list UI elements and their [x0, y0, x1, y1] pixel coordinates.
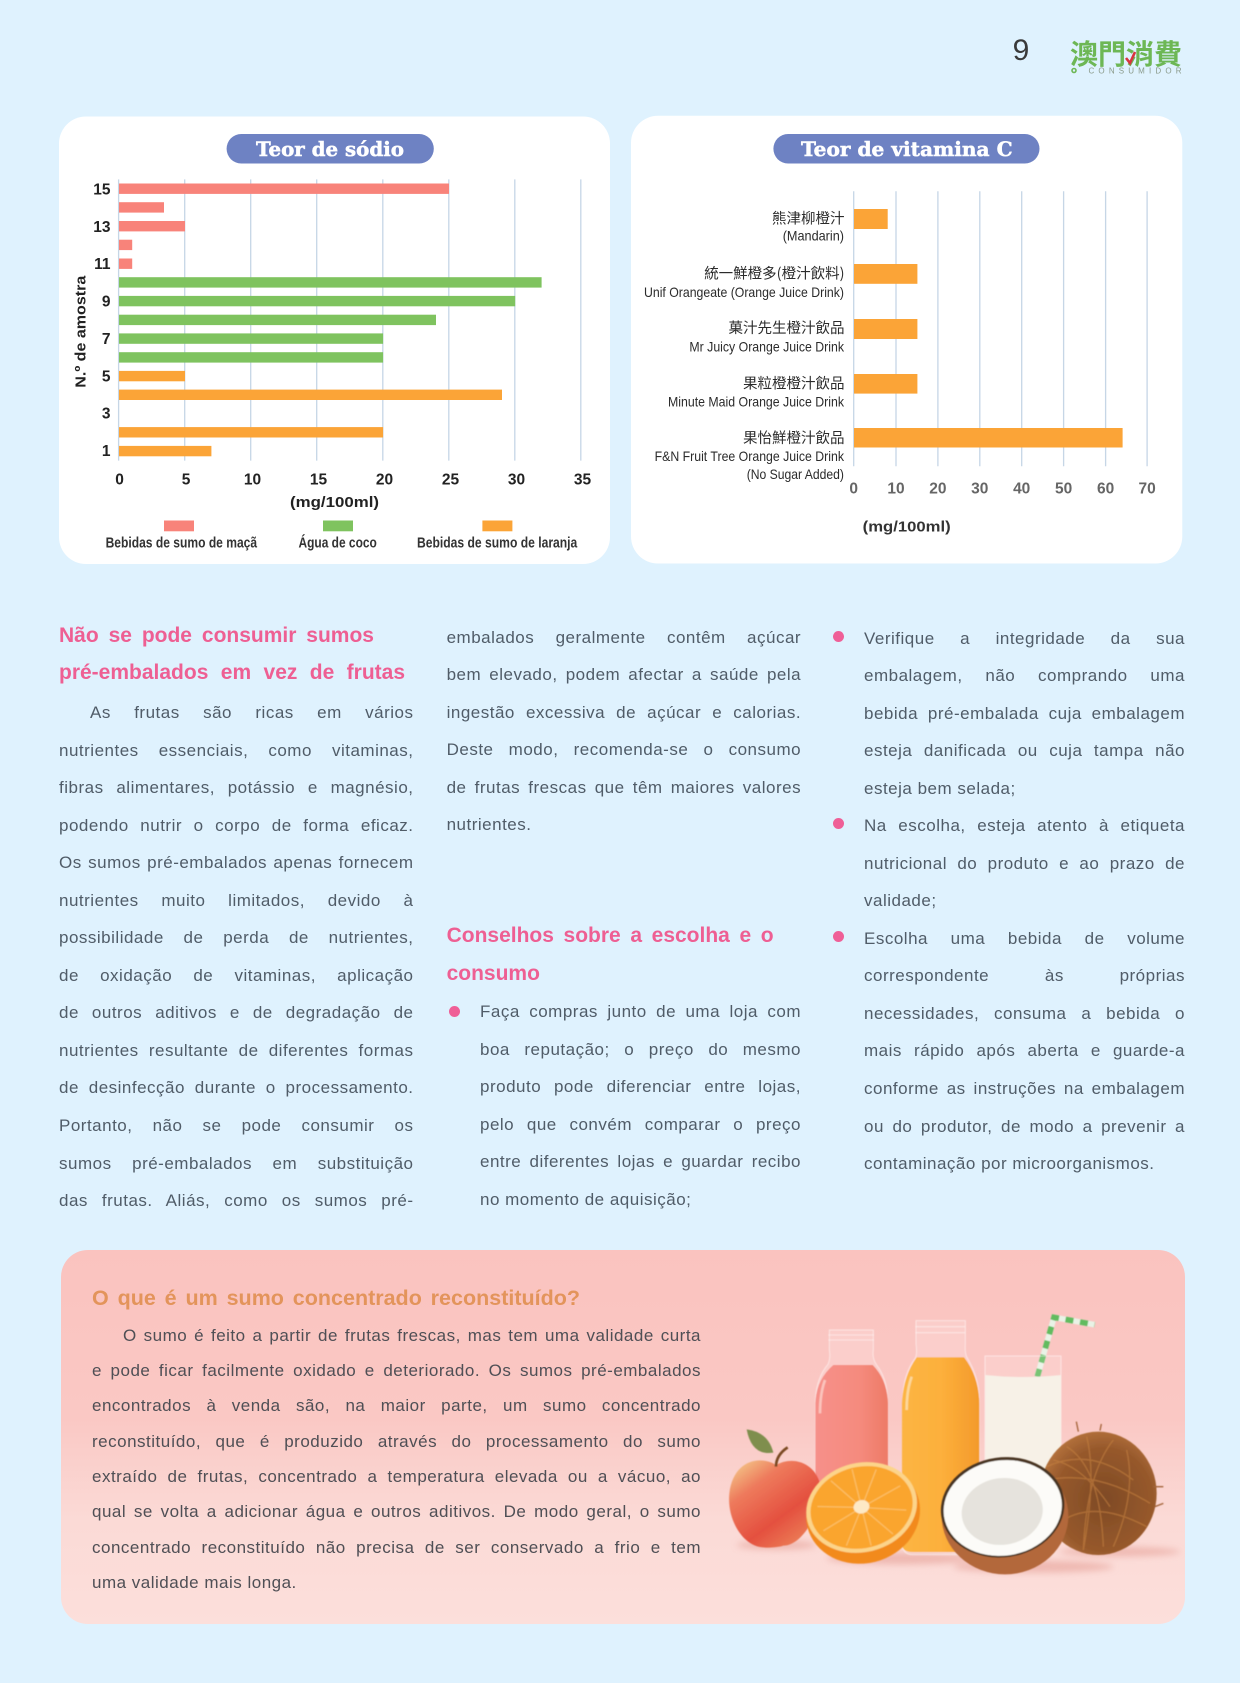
- product labels: Mr Juicy Orange Juice Drink: [689, 339, 845, 355]
- heading: Não se pode consumir sumos pré-embalados em vez de frutas: Não se pode consumir sumos: [59, 624, 374, 647]
- text block: column 2 body: ingestão excessiva de açúcar e calorias.: [447, 703, 801, 722]
- heading: Conselhos sobre a escolha e o consumo: consumo: [447, 962, 540, 985]
- bullet: integridade da embalagem: embalagem, não comprando uma: [864, 666, 1185, 685]
- bullet: loja com boa reputação: Faça compras junto de uma loja com: [480, 1002, 801, 1021]
- legend: Bebidas de sumo de maçã: [106, 534, 258, 552]
- text block: explainer body: qual se volta a adicionar água e outros aditivos. De modo geral, o sumo: [92, 1502, 701, 1521]
- bars: coconut water: [119, 277, 542, 363]
- x axis unit: (mg/100ml): [863, 518, 951, 536]
- product labels: 果怡鮮橙汁飲品: [743, 427, 844, 448]
- panel: concentrated juice explainer: [61, 1250, 1185, 1624]
- y axis title: N.º de amostra: [72, 275, 90, 388]
- bars: vitamin C by product: [854, 209, 1123, 448]
- bullet: loja com boa reputação: boa reputação; o preço do mesmo: [480, 1040, 801, 1059]
- x axis labels: 20: [929, 480, 947, 497]
- heading pill: Teor de sódio: Teor de sódio: [256, 137, 404, 161]
- x axis labels: 10: [887, 480, 905, 497]
- bullet: volume e conservação: conforme as instruções na embalagem: [864, 1079, 1185, 1098]
- text block: explainer body: reconstituído, que é produzido através do processamento do sumo: [92, 1432, 701, 1451]
- text block: column 1 body: fibras alimentares, potássio e magnésio,: [59, 778, 414, 797]
- x axis labels: 15: [310, 471, 327, 488]
- page number: 9: [1013, 34, 1029, 67]
- x axis labels: 25: [442, 471, 459, 488]
- bullet: etiqueta nutricional: nutricional do produto e ao prazo de: [864, 854, 1185, 873]
- bullet: volume e conservação: contaminação por microorganismos.: [864, 1154, 1155, 1173]
- bullet: loja com boa reputação: no momento de aquisição;: [480, 1190, 691, 1209]
- bullet: etiqueta nutricional: validade;: [864, 891, 937, 910]
- bullet: integridade da embalagem: esteja bem selada;: [864, 779, 1016, 798]
- text block: explainer body: O sumo é feito a partir de frutas frescas, mas tem uma validade curta: [123, 1326, 701, 1344]
- text block: column 2 body: [447, 628, 801, 834]
- product labels: 菓汁先生橙汁飲品: [728, 317, 844, 338]
- heading pill: Teor de vitamina C: Teor de vitamina C: [801, 137, 1013, 161]
- product labels: [644, 208, 845, 482]
- x axis unit: (mg/100ml): [290, 494, 379, 511]
- icon: whole coconut: [1040, 1422, 1163, 1555]
- text block: column 2 body: nutrientes.: [447, 815, 531, 834]
- illustration: juices and fruit: [728, 1314, 1178, 1576]
- text block: column 2 body: Deste modo, recomenda-se o consumo: [447, 740, 801, 759]
- text block: column 1 body: de oxidação de vitaminas, aplicação: [59, 966, 414, 985]
- y axis labels: 7: [102, 331, 110, 348]
- bullet: volume e conservação: [833, 929, 1185, 1173]
- bullet: loja com boa reputação: [449, 1002, 801, 1209]
- text block: column 1 body: das frutas. Aliás, como os sumos pré-: [59, 1191, 414, 1210]
- bullet: etiqueta nutricional: Na escolha, esteja atento à etiqueta: [864, 816, 1185, 835]
- text block: column 1 body: Os sumos pré-embalados apenas fornecem: [59, 853, 414, 872]
- legend: [106, 520, 578, 552]
- x axis labels: 60: [1097, 480, 1114, 497]
- bars: apple juice drinks: [119, 184, 449, 269]
- x axis labels: 10: [244, 471, 261, 488]
- y axis labels: 1: [102, 443, 111, 460]
- logo: Consumidor: 澳門消費: [1070, 32, 1182, 72]
- bullet: loja com boa reputação: entre diferentes lojas e guardar recibo: [480, 1152, 801, 1171]
- product labels: (No Sugar Added): [747, 466, 844, 482]
- text block: column 1 body: podendo nutrir o corpo de forma eficaz.: [59, 816, 414, 835]
- x axis labels: 30: [508, 471, 525, 488]
- text block: column 1 body: nutrientes essenciais, como vitaminas,: [59, 741, 414, 760]
- text block: column 1 body: nutrientes resultante de diferentes formas: [59, 1041, 414, 1060]
- text block: column 2 body: embalados geralmente contêm açúcar: [447, 628, 801, 647]
- icon: half coconut: [934, 1449, 1071, 1574]
- x axis labels: 0: [849, 480, 858, 497]
- text block: column 1 body: possibilidade de perda de nutrientes,: [59, 928, 414, 947]
- y axis labels: 15: [93, 181, 111, 198]
- bullet: integridade da embalagem: esteja danificada ou cuja tampa não: [864, 741, 1185, 760]
- y axis labels: [93, 181, 111, 460]
- text block: column 1 body: de desinfecção durante o processamento.: [59, 1078, 414, 1097]
- product labels: Unif Orangeate (Orange Juice Drink): [644, 284, 844, 300]
- x axis labels: 30: [971, 480, 988, 497]
- bullet: volume e conservação: mais rápido após aberta e guarde-a: [864, 1041, 1185, 1060]
- bullet: etiqueta nutricional: [833, 816, 1185, 910]
- heading: Conselhos sobre a escolha e o consumo: [447, 924, 774, 985]
- icon: half orange: [795, 1450, 931, 1576]
- bullet: volume e conservação: necessidades, consuma a bebida o: [864, 1004, 1185, 1023]
- bullet: integridade da embalagem: Verifique a integridade da sua: [864, 629, 1185, 648]
- bullet: volume e conservação: ou do produtor, de modo a prevenir a: [864, 1117, 1185, 1136]
- product labels: F&N Fruit Tree Orange Juice Drink: [655, 448, 845, 464]
- x axis labels: 70: [1138, 480, 1156, 497]
- text block: explainer body: extraído de frutas, concentrado a temperatura elevada ou a vácuo, ao: [92, 1467, 701, 1486]
- x axis labels: 0: [115, 471, 124, 488]
- text block: column 2 body: bem elevado, podem afectar a saúde pela: [447, 665, 801, 684]
- x axis labels: 40: [1013, 480, 1030, 497]
- y axis labels: 13: [93, 219, 111, 236]
- legend: Água de coco: [298, 534, 377, 552]
- text block: explainer body: concentrado reconstituído não precisa de ser conservado a frio e tem: [92, 1538, 701, 1557]
- text block: explainer body: e pode ficar facilmente oxidado e deteriorado. Os sumos pré-embalados: [92, 1361, 701, 1380]
- glass: coconut milk with straw: [985, 1317, 1095, 1472]
- text block: column 1 body: Portanto, não se pode consumir os: [59, 1116, 414, 1135]
- heading: Conselhos sobre a escolha e o consumo: Conselhos sobre a escolha e o: [447, 924, 774, 947]
- text block: column 1 body: de outros aditivos e de degradação de: [59, 1003, 414, 1022]
- text block: column 1 body: As frutas são ricas em vários: [90, 703, 414, 722]
- product labels: 熊津柳橙汁: [772, 208, 844, 228]
- text block: column 1 body: sumos pré-embalados em substituição: [59, 1154, 414, 1173]
- product labels: 統一鮮橙多(橙汁飲料): [704, 262, 844, 284]
- bottle: orange juice: [902, 1321, 979, 1555]
- heading pill: Teor de sódio: [227, 134, 434, 164]
- x axis labels: [115, 471, 591, 488]
- heading: O que é um sumo concentrado reconstituído?: O que é um sumo concentrado reconstituído?: [92, 1286, 580, 1310]
- heading: Não se pode consumir sumos pré-embalados em vez de frutas: [59, 624, 405, 684]
- text block: column 1 body: [59, 703, 414, 1210]
- bullet: integridade da embalagem: bebida pré-embalada cuja embalagem: [864, 704, 1185, 723]
- bullet: volume e conservação: correspondente às próprias: [864, 966, 1185, 985]
- charts and page header: [59, 32, 1182, 564]
- panel: sodium content chart: [59, 116, 610, 564]
- product labels: Minute Maid Orange Juice Drink: [668, 393, 845, 409]
- bars: orange juice drinks: [119, 371, 502, 456]
- y axis labels: 11: [94, 256, 111, 273]
- bullet: loja com boa reputação: pelo que convém comparar o preço: [480, 1115, 801, 1134]
- y axis labels: 3: [102, 406, 111, 422]
- bullet: integridade da embalagem: [833, 629, 1185, 798]
- text block: explainer body: [92, 1326, 701, 1592]
- bullet: loja com boa reputação: produto pode diferenciar entre lojas,: [480, 1077, 801, 1096]
- heading: Não se pode consumir sumos pré-embalados em vez de frutas: pré-embalados em vez de frutas: [59, 661, 405, 684]
- bottle: apple juice: [815, 1330, 888, 1493]
- logo: Consumidor: CONSUMIDOR: [1088, 66, 1182, 76]
- x axis labels: 35: [574, 471, 591, 488]
- bullet: volume e conservação: Escolha uma bebida de volume: [864, 929, 1185, 948]
- legend: Bebidas de sumo de laranja: [417, 534, 578, 552]
- text block: explainer body: uma validade mais longa.: [92, 1573, 297, 1592]
- product labels: 果粒橙橙汁飲品: [743, 372, 844, 393]
- heading pill: Teor de vitamina C: [773, 134, 1040, 164]
- product labels: (Mandarin): [783, 228, 844, 244]
- x axis labels: [849, 480, 1156, 497]
- x axis labels: 5: [182, 471, 191, 488]
- x axis labels: 20: [376, 471, 393, 488]
- icon: apple: [729, 1429, 821, 1548]
- text block: column 2 body: de frutas frescas que têm maiores valores: [447, 778, 801, 797]
- x axis labels: 50: [1055, 480, 1072, 497]
- panel: vitamin C content chart: [631, 116, 1182, 564]
- y axis labels: 5: [102, 368, 111, 385]
- y axis labels: 9: [102, 294, 111, 310]
- text block: column 1 body: nutrientes muito limitados, devido à: [59, 891, 414, 910]
- text block: explainer body: encontrados à venda são, na maior parte, um sumo concentrado: [92, 1396, 701, 1415]
